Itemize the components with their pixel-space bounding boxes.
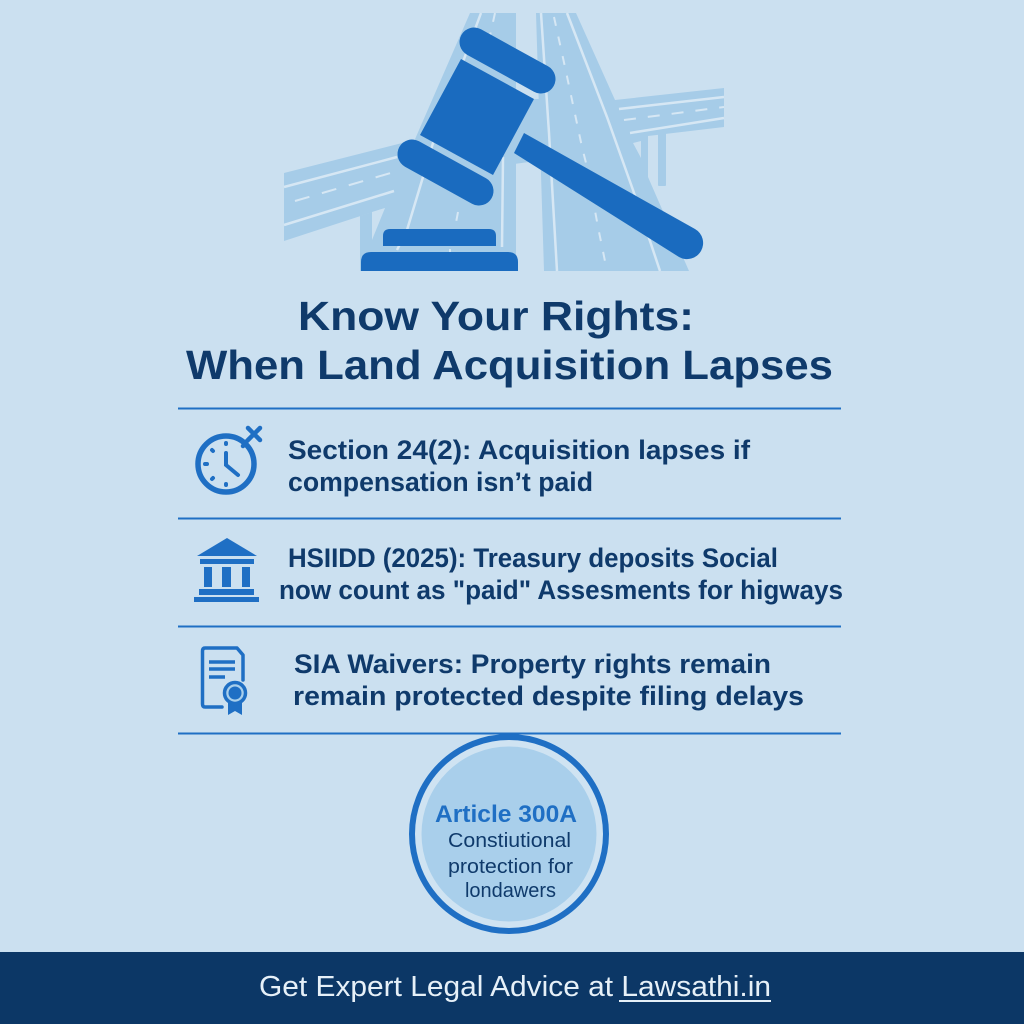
text: SIA waivers: [293, 649, 804, 711]
badge: Article 300A: [412, 737, 606, 931]
text: HSIIDD (2025): HSIIDD (2025): Treasury deposits Social: [288, 543, 778, 573]
title: Know Your Rights:: [298, 293, 694, 339]
icon: certificate document: [202, 648, 246, 715]
badge: Article 300A: londawers: [465, 880, 556, 902]
row: section 24(2): [198, 428, 751, 497]
footer banner: [0, 952, 1024, 1024]
text: HSIIDD (2025): [279, 543, 843, 605]
icon: government building: [194, 538, 259, 602]
badge: Article 300A: Article 300A: [435, 801, 577, 828]
text: section 24(2): compensation isn’t paid: [288, 467, 593, 497]
title: When Land Acquisition Lapses: [186, 342, 833, 388]
text: SIA waivers: SIA Waivers: Property rights remain: [294, 649, 771, 679]
gavel: [412, 42, 703, 259]
hero illustration: gavel over highways: [284, 13, 724, 271]
text: section 24(2): [288, 435, 751, 497]
footer banner: Get Expert Legal Advice at Lawsathi.in: [259, 971, 771, 1003]
icon: clock with cross: [198, 428, 260, 492]
badge: Article 300A: protection for: [448, 856, 573, 878]
badge: Article 300A: Constiutional: [448, 830, 571, 852]
row: HSIIDD (2025): [194, 538, 843, 605]
highway roads: [284, 13, 724, 271]
row: SIA waivers: [202, 648, 804, 715]
title: [186, 293, 833, 388]
gavel base: [361, 229, 518, 271]
text: HSIIDD (2025): now count as "paid" Assesments for higways: [279, 575, 843, 605]
text: section 24(2): Section 24(2): Acquisition lapses if: [288, 435, 751, 465]
text: SIA waivers: remain protected despite filing delays: [293, 681, 804, 711]
